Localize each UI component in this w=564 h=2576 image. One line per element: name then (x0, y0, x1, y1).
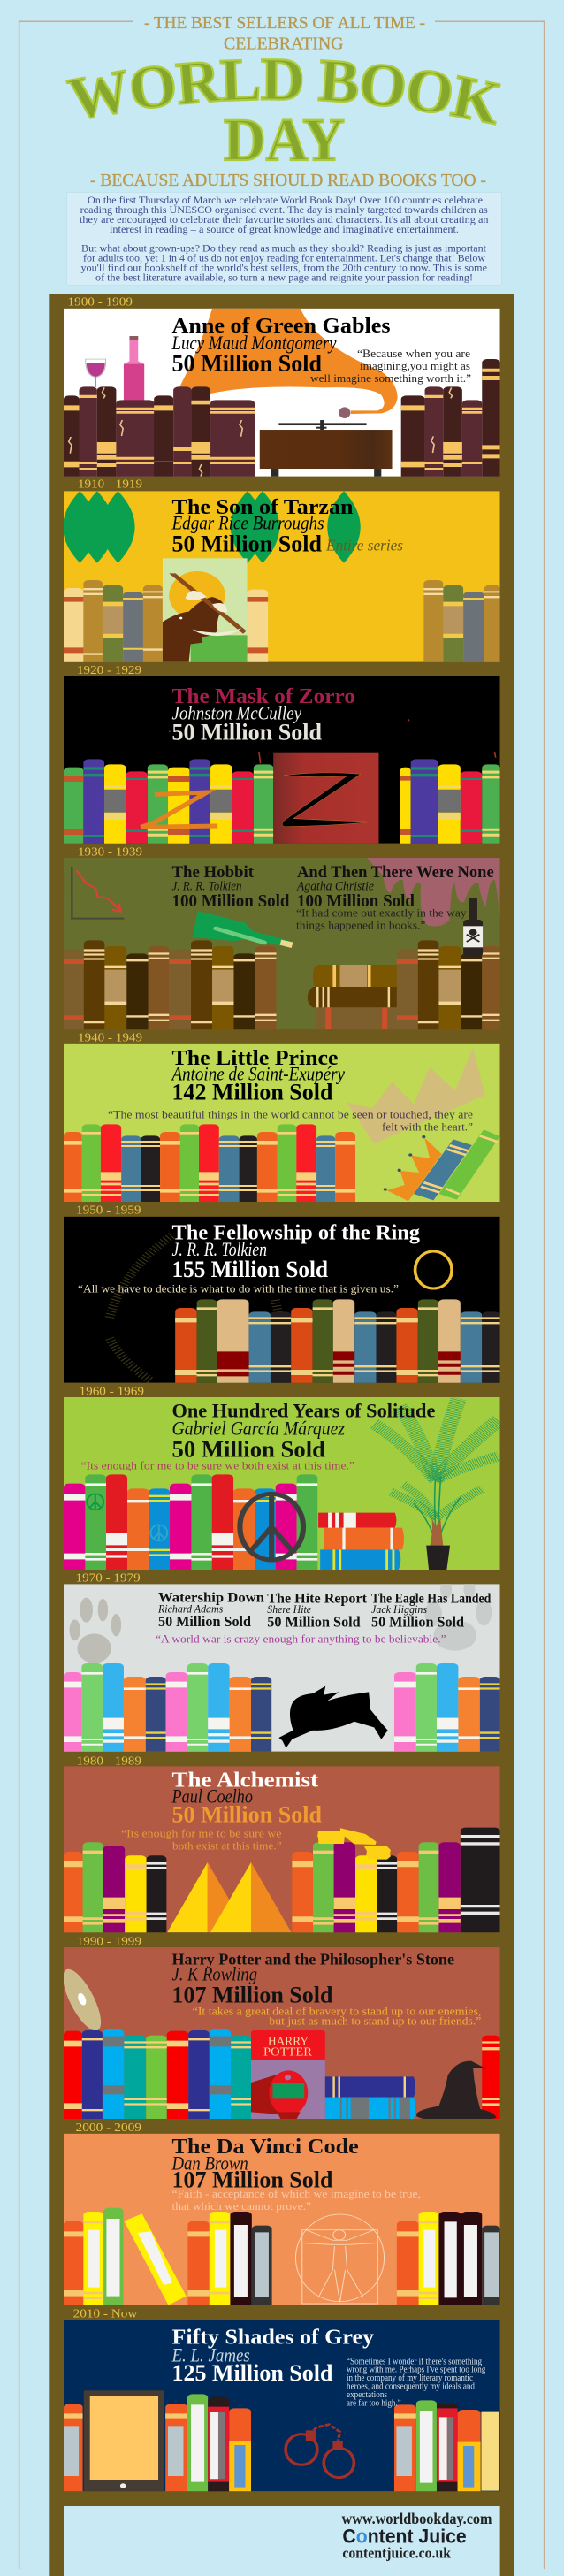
quote: expectations (347, 2390, 387, 2400)
quote: “The most beautiful things in the world cannot be seen or touched, they are (108, 1108, 473, 1121)
panel: 1950-1959 The Fellowship of the Ring (64, 1204, 500, 1387)
author: Paul Coelho (171, 1785, 253, 1807)
year label 2010-Now: 2010 - Now (73, 2308, 138, 2321)
quote: in the company of my literary romantic (347, 2373, 473, 2383)
quote (310, 347, 471, 385)
blood drips (367, 858, 500, 926)
book 2: And Then There Were None: 100 Million Sold (297, 891, 415, 911)
copies sold: 142 Million Sold (171, 1079, 333, 1105)
copies sold: 107 Million Sold (171, 1982, 333, 2007)
book title: The Little Prince (171, 1047, 339, 1070)
copies sold: 107 Million Sold (171, 2167, 333, 2192)
quote: but just as much to stand up to our friends.” (269, 2014, 482, 2027)
book cover: Harry Potter (251, 2030, 325, 2119)
panel: 1940-1949 The Little Prince (64, 1032, 500, 1206)
copies sold: 50 Million Sold (171, 531, 323, 556)
books: jungle shelf (64, 580, 500, 666)
book 3: The Eagle Has Landed (371, 1591, 491, 1631)
books: dark red shelf (64, 359, 500, 480)
books: horizontal stack (318, 1513, 404, 1570)
panel: 1930-1939 The Hobbit and And Then There Were None (64, 845, 500, 1034)
panel artwork (64, 491, 500, 662)
icon: large peace sign (240, 1494, 303, 1560)
quote: felt with the heart.” (382, 1120, 473, 1134)
panel: footer credits (64, 2506, 500, 2576)
icon: Vitruvian man (295, 2214, 385, 2304)
panel: 1970-1979 Watership Down, The Hite Report, The Eagle Has Landed (64, 1572, 500, 1755)
book 1: The Hobbit: J. R. R. Tolkien (171, 880, 242, 894)
icon: poison bottle (463, 898, 483, 957)
icon: gramophone (176, 309, 398, 477)
book title: The Mask of Zorro (171, 685, 355, 708)
books: horizontal stack (308, 965, 397, 1029)
books: shelf (64, 2208, 500, 2310)
copies sold: 50 Million Sold (171, 1802, 323, 1828)
icon: tablet (84, 2390, 164, 2491)
book title: Fifty Shades of Grey (171, 2327, 374, 2350)
copies sold: 125 Million Sold (171, 2360, 333, 2386)
books: wizard shelf (64, 2029, 500, 2123)
logo url: contentjuice.co.uk (342, 2545, 451, 2562)
copies sold: 155 Million Sold (171, 1257, 329, 1282)
quote: “Because when you are (357, 347, 470, 360)
year label 1960-1969: 1960 - 1969 (80, 1385, 144, 1398)
books: shelf (175, 1299, 500, 1387)
author: J. K Rowling (171, 1962, 257, 1984)
chart icon: falling line (72, 867, 124, 919)
panel: 2010-Now Fifty Shades of Grey (64, 2308, 500, 2496)
panel artwork (64, 1584, 500, 1752)
title: Day: DAY (224, 106, 345, 173)
icon: sorting hat (416, 2061, 497, 2121)
icon: wine glass (86, 359, 106, 387)
book cover: elephant (163, 558, 248, 662)
book 3: The Eagle Has Landed: The Eagle Has Landed (371, 1591, 491, 1606)
book 1: The Hobbit: The Hobbit (171, 863, 255, 882)
quote: “Faith - acceptance of which we imagine to be true, (171, 2187, 421, 2200)
year label 1950-1959: 1950 - 1959 (76, 1204, 141, 1218)
quote: “All we have to decide is what to do with the time that is given us.” (78, 1282, 399, 1296)
year label 1940-1949: 1940 - 1949 (78, 1032, 142, 1045)
subtitle: - BECAUSE ADULTS SHOULD READ BOOKS TOO - (90, 171, 486, 190)
panel artwork (64, 1947, 500, 2119)
intro text block: interest in reading – a source of great knowledge and imaginative entertainment. (110, 223, 459, 235)
books: colourful shelf (64, 759, 500, 847)
panel artwork (64, 676, 500, 844)
icon: green bottle (193, 911, 293, 948)
book title: The Da Vinci Code (171, 2136, 359, 2159)
quote (193, 2004, 482, 2027)
books: shelf (64, 2394, 481, 2496)
book 2: The Hite Report: Shere Hite (267, 1602, 311, 1616)
author: Johnston McCulley (171, 701, 301, 723)
panel: 1920-1929 The Mask of Zorro (64, 664, 500, 847)
books: bright shelf (64, 1474, 317, 1574)
intro text block: On the first Thursday of March we celebrate World Book Day! Over 100 countries celebrate (88, 194, 483, 206)
quote: wrong with me. Perhaps I've spent too long (347, 2366, 485, 2375)
panel artwork (64, 1397, 500, 1570)
note: entire series: Entire series (325, 537, 403, 554)
year label 2000-2009: 2000 - 2009 (76, 2121, 141, 2135)
quote: both exist at this time.” (172, 1839, 282, 1853)
book 2: And Then There Were None: And Then There Were None (297, 863, 494, 882)
icon: right paw print (425, 1580, 492, 1651)
icon: gold coins (317, 1828, 391, 1860)
quote: are far too high.” (347, 2398, 401, 2408)
icon: handcuffs (286, 2425, 354, 2478)
title: World Book: WORLD BOOK (65, 58, 501, 126)
quote (347, 2357, 485, 2408)
book 1: The Hobbit: 100 Million Sold (171, 891, 290, 911)
book 2: The Hite Report: 50 Million Sold (267, 1614, 361, 1631)
panel artwork (64, 308, 500, 477)
book 2: And Then There Were None: Agatha Christie (296, 880, 374, 894)
book 1: Watership Down: Richard Adams (157, 1601, 223, 1615)
copies sold: 50 Million Sold (171, 350, 323, 376)
quote: “Sometimes I wonder if there's something (347, 2357, 482, 2366)
books: left shelf (64, 1842, 166, 1937)
quote: that which we cannot prove.” (171, 2199, 311, 2213)
quote: well imagine something worth it.” (310, 371, 471, 385)
year label 1970-1979: 1970 - 1979 (76, 1572, 141, 1586)
quote: heroes, and consequently my ideals and (347, 2382, 475, 2392)
icon: crown shadow (346, 1048, 485, 1143)
Harry Potter book label: POTTER (263, 2045, 313, 2059)
author: Dan Brown (171, 2152, 248, 2174)
icon: small peace signs (87, 1494, 167, 1540)
author: Edgar Rice Burroughs (171, 511, 324, 533)
quote: “Its enough for me to be sure we both exist at this time.” (81, 1459, 354, 1472)
books: pastel shelf (64, 1663, 500, 1755)
year label 1990-1999: 1990 - 1999 (77, 1935, 141, 1948)
book title: The Fellowship of the Ring (171, 1222, 420, 1245)
panel: 1910-1919 The Son of Tarzan (63, 478, 500, 666)
panel artwork (64, 1766, 500, 1933)
books: right shelf (292, 1828, 500, 1937)
panel: 1900-1909 Anne of Green Gables (64, 295, 500, 480)
icon: running hare (278, 1686, 388, 1748)
book 2: The Hite Report (267, 1591, 368, 1631)
quote: imagining,you might as (360, 359, 470, 372)
intro text block: they are encouraged to celebrate their favourite stories and characters. It's all about creating an (80, 213, 488, 225)
intro text block: of the best literature available, so turn a new page and reignite your passion for reading! (95, 271, 473, 284)
Harry Potter book label (263, 2035, 313, 2059)
intro text block: for adults too, yet 1 in 4 of us do not enjoy reading for entertainment. Let's change that! Below (83, 252, 485, 264)
icon: the one ring (415, 1251, 452, 1288)
book 3: The Eagle Has Landed: Jack Higgins (371, 1602, 427, 1616)
book title: Harry Potter and the Philosopher's Stone (171, 1950, 454, 1968)
year label 1900-1909: 1900 - 1909 (67, 295, 133, 309)
panel: 1980-1989 The Alchemist (64, 1754, 500, 1937)
header: best sellers strapline: - THE BEST SELLERS OF ALL TIME - (144, 13, 425, 33)
books: stack (325, 2076, 415, 2119)
author: Lucy Maud Montgomery (171, 332, 337, 354)
panel artwork (64, 1217, 500, 1383)
year label 1910-1919: 1910 - 1919 (78, 478, 142, 492)
book title: Anne of Green Gables (171, 315, 391, 338)
quote (296, 906, 467, 932)
quote (171, 2187, 421, 2213)
quote: “A world war is crazy enough for anything to be believable.” (156, 1632, 446, 1645)
panel: 1990-1999 Harry Potter (56, 1935, 500, 2123)
author: Gabriel García Márquez (171, 1418, 345, 1440)
icon: jungle leaves (63, 491, 361, 563)
intro text block: you'll find our bookshelf of the world's best sellers, from the 20th century to now. This is some (81, 262, 487, 274)
book 2: The Hite Report: The Hite Report (267, 1591, 368, 1606)
panel artwork (64, 858, 500, 1029)
quote: “Its enough for me to be sure we (121, 1827, 282, 1840)
main title arc path (75, 99, 492, 124)
header: celebrating: CELEBRATING (224, 34, 343, 54)
quote: “It takes a great deal of bravery to stand up to our enemies, (193, 2004, 481, 2017)
source url: www.worldbookday.com (341, 2510, 492, 2527)
books: leaning (414, 1129, 500, 1200)
bookshelf frame (49, 294, 514, 2576)
book bands (64, 369, 500, 470)
quote (108, 1108, 473, 1134)
elvish script decoration (110, 1235, 278, 1381)
icon: small crown (384, 1135, 442, 1201)
author: Antoine de Saint-Exupéry (171, 1063, 345, 1085)
copies sold: 50 Million Sold (171, 720, 323, 745)
book: leaning yellow (124, 2213, 187, 2305)
author: J. R. R. Tolkien (171, 1238, 267, 1260)
panel artwork (64, 2133, 500, 2305)
icon: painted Z (141, 792, 217, 827)
icon: pyramids (167, 1862, 292, 1932)
copies sold: 50 Million Sold (171, 1436, 326, 1462)
quote (121, 1827, 282, 1853)
book title: The Son of Tarzan (171, 496, 354, 519)
book cover: Zorro Z (273, 753, 378, 844)
book 1: Watership Down: Watership Down (158, 1591, 264, 1606)
author: E. L. James (171, 2344, 250, 2366)
icon: left paw print (70, 1598, 121, 1663)
book title: The Alchemist (171, 1770, 318, 1792)
book title: One Hundred Years of Solitude (171, 1400, 436, 1422)
books: red green shelf (64, 1124, 355, 1206)
icon: palm plant (374, 1399, 499, 1570)
quote: “It had come out exactly in the way (296, 906, 467, 920)
year label 1980-1989: 1980 - 1989 (77, 1754, 141, 1768)
panel artwork (64, 2320, 500, 2492)
year label 1930-1939: 1930 - 1939 (78, 845, 142, 859)
panel: 2000-2009 The Da Vinci Code (64, 2121, 500, 2310)
book 3: The Eagle Has Landed: 50 Million Sold (371, 1614, 465, 1631)
icon: wine bottle (124, 336, 144, 401)
panel: 1960-1969 One Hundred Years of Solitude (64, 1385, 500, 1574)
logo: Content Juice: Content Juice (342, 2526, 467, 2548)
icon: golden snitch disc (56, 1966, 109, 2035)
quote: things happened in books.” (296, 919, 426, 932)
book 1: Watership Down (157, 1591, 264, 1630)
intro text block (67, 193, 502, 285)
panel artwork (64, 1043, 500, 1202)
Harry Potter book label: HARRY (268, 2035, 309, 2048)
intro text block: But what about grown-ups? Do they read as much as they should? Reading is just as important (81, 242, 487, 255)
intro text block: reading through this UNESCO organised event. The day is mainly targeted towards children as (80, 203, 488, 216)
book 1: Watership Down: 50 Million Sold (158, 1613, 252, 1630)
books: brown shelf (64, 940, 500, 1034)
book 2: And Then There Were None (296, 863, 494, 911)
year label 1920-1929: 1920 - 1929 (77, 664, 141, 677)
book 1: The Hobbit (171, 863, 290, 911)
